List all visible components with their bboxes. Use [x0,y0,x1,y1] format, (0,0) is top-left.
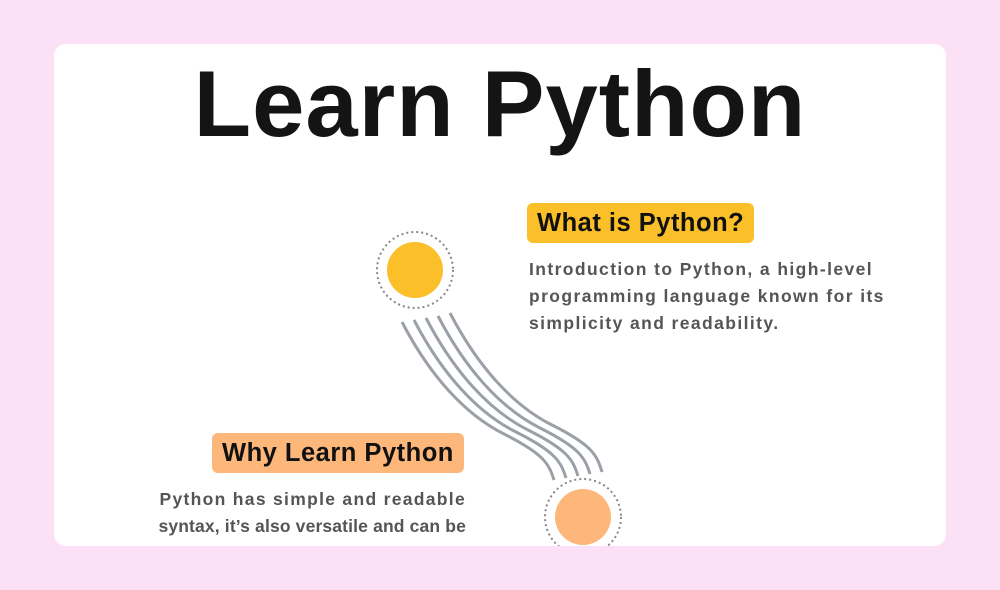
card [54,44,946,546]
text: what is python: simplicity and readability. [529,313,779,333]
arrow: curved lines [402,313,602,480]
title: Learn Python [194,51,806,156]
icon: orange node [545,479,621,555]
icon: yellow node [377,232,453,308]
text: why learn python [158,489,466,536]
tag: Why Learn Python: Why Learn Python [222,439,454,467]
text: what is python [529,259,885,333]
text: what is python: programming language known for its [529,286,885,306]
text: why learn python: syntax, it’s also versatile and can be [158,516,466,536]
connector graphic [376,231,622,546]
tag: What is Python: What is Python? [537,209,744,237]
tag: Why Learn Python [212,433,464,473]
tag: What is Python [527,203,754,243]
text: what is python: Introduction to Python, a high-level [529,259,873,279]
text: why learn python: Python has simple and readable [160,489,466,509]
